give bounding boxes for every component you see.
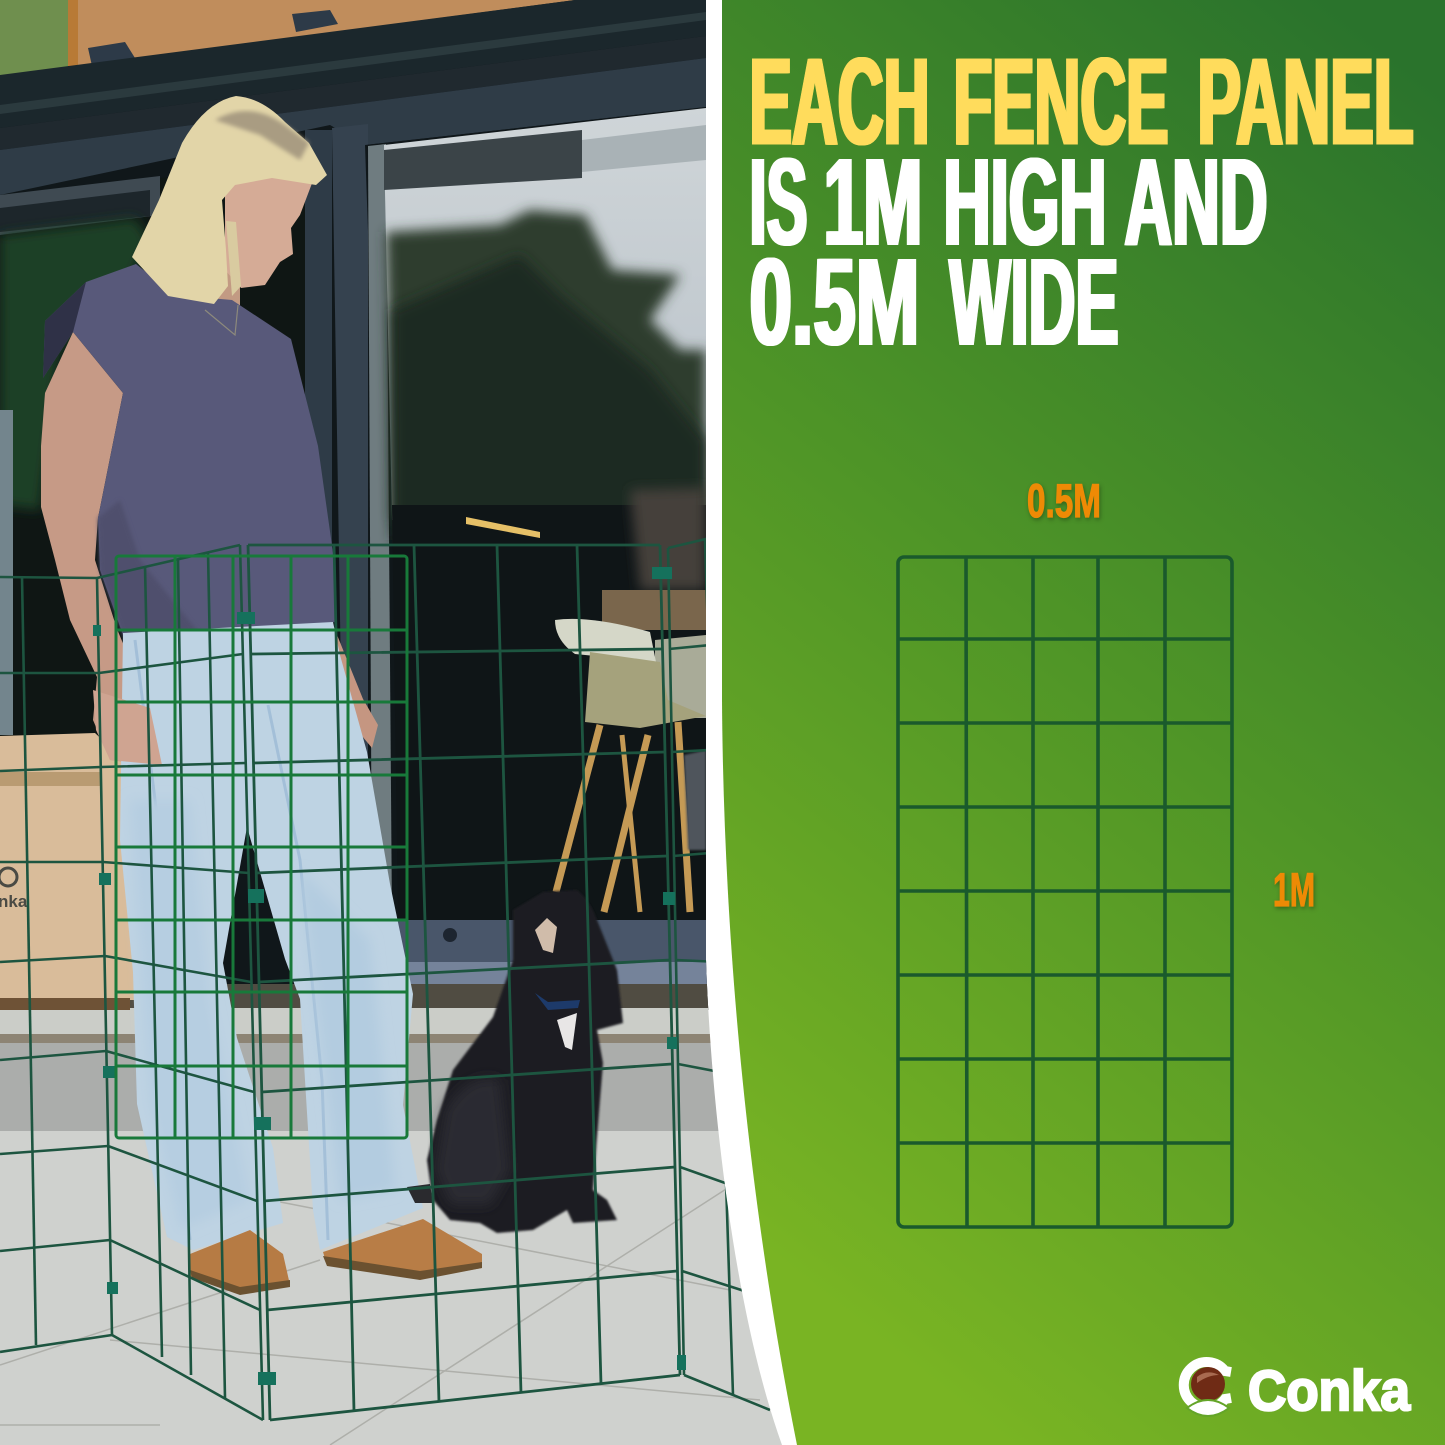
panel: green curved background [722,0,1445,1445]
right arm [333,625,378,748]
face [225,170,314,288]
title line 2: HIGH [944,134,1107,272]
title line 1 [750,34,1414,171]
title line 3: 0.5M [750,234,920,372]
neck [218,272,240,306]
woman [41,96,482,1295]
dog [407,890,623,1233]
fence clips [93,567,686,1385]
fence: main panel [248,545,680,1420]
shirt [43,264,336,638]
title line 1: FENCE [954,34,1169,171]
house background [0,0,720,1010]
highlighted fence panel overlay [116,556,407,1138]
label: width 0.5M: 0.5M [1027,474,1101,527]
fence panel diagram [898,557,1232,1227]
title line 3: WIDE [950,234,1119,372]
hands [93,690,162,765]
logo wordmark: Conka [1248,1359,1411,1423]
necklace [205,305,238,335]
left arm [41,332,123,762]
logo: Conka [1184,1359,1411,1423]
boots [190,1230,289,1287]
title [750,34,1414,372]
fence: right panel [668,538,770,1410]
title line 2: IS [750,134,808,272]
jeans [120,622,423,1250]
logo icon [1184,1362,1231,1416]
fence: left panel [0,577,112,1352]
cardboard box [0,733,135,1010]
fence: second panel [97,545,263,1420]
hair [132,96,327,304]
patio step and paving [0,1008,790,1445]
label: height 1M: 1M [1273,863,1315,916]
title line 1: EACH [750,34,930,171]
title line 2: 1M [824,134,923,272]
title line 2 [750,134,1268,272]
panel: photo of woman and dog inside fence [0,0,790,1445]
title line 2: AND [1125,134,1268,272]
